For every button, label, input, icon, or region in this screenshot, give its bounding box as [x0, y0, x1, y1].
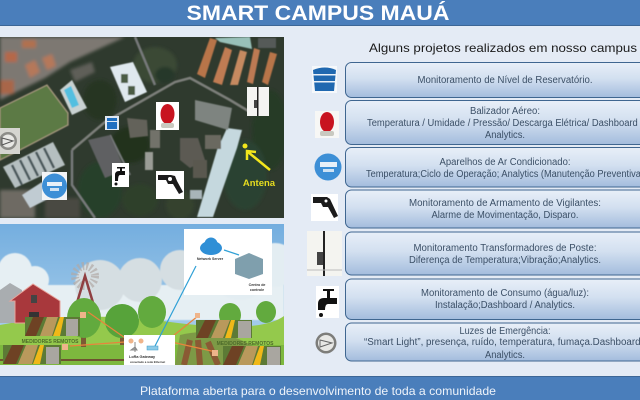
project: reservoir	[312, 62, 640, 98]
wooded patches	[83, 80, 117, 120]
link: gateway to server	[155, 266, 196, 346]
icon: air conditioner on photo	[42, 172, 67, 200]
LoRa gateway box	[124, 335, 175, 365]
card: emergency lights	[346, 323, 640, 361]
residential block	[0, 37, 125, 100]
clouds	[0, 240, 297, 320]
icon: water tank	[312, 66, 337, 93]
grass	[0, 316, 284, 345]
card: consumption: Instalação;Dashboard / Analytics.	[435, 300, 575, 311]
card: air conditioning: Aparelhos de Ar Condicionado:	[440, 157, 570, 168]
card: weapons: Monitoramento de Armamento de Vigilantes:	[409, 198, 601, 209]
football field	[0, 85, 68, 160]
LoRa links	[70, 312, 216, 352]
card: beacon	[346, 100, 640, 144]
icon: air conditioner	[314, 154, 342, 180]
network server box: Network Server	[197, 257, 224, 261]
long white building	[197, 128, 242, 217]
card: consumption: Monitoramento de Consumo (água/luz):	[421, 288, 589, 299]
dark buildings	[127, 118, 148, 138]
label: remote meters left: MEDIDORES REMOTOS	[22, 339, 79, 345]
fence	[0, 359, 125, 361]
label: remote meters right: MEDIDORES REMOTOS	[217, 341, 274, 347]
project: air conditioning	[314, 148, 640, 187]
card: reservoir	[346, 62, 640, 98]
icon: water tank on photo	[105, 116, 119, 130]
antenna label: Antena	[243, 178, 276, 189]
icon: faucet	[316, 286, 339, 318]
card: beacon: Analytics.	[485, 130, 525, 141]
network server box	[184, 229, 272, 295]
card: emergency lights: Analytics.	[485, 350, 525, 361]
card: transformers: Diferença de Temperatura;Vibração;Analytics.	[409, 255, 601, 266]
trees	[67, 296, 276, 347]
footer bar	[0, 376, 640, 400]
footer text: Plataforma aberta para o desenvolvimento de toda a comunidade	[140, 384, 496, 398]
icon: light marker on photo	[156, 102, 179, 130]
title: SMART CAMPUS MAUÁ	[186, 2, 450, 25]
icon: revolver	[311, 194, 338, 221]
card: emergency lights: Luzes de Emergência:	[460, 326, 550, 337]
card: air conditioning	[346, 148, 640, 187]
icon: pole transformer	[307, 231, 342, 276]
project: guards' weapons	[311, 190, 640, 228]
network server box: controle	[250, 288, 264, 292]
card: transformers	[346, 232, 640, 275]
striped hall	[3, 142, 65, 188]
icon: transformer pole on photo	[247, 87, 269, 116]
icon: revolver on photo	[156, 171, 184, 199]
road	[72, 78, 250, 150]
orange roofs	[197, 38, 217, 78]
sensors: remote meters	[3, 317, 281, 365]
card: reservoir: Monitoramento de Nível de Reservatório.	[418, 75, 592, 86]
ploughed field	[175, 332, 253, 365]
white building	[110, 62, 147, 102]
red barn	[10, 284, 60, 323]
icon: beacon	[315, 111, 339, 138]
parking	[195, 100, 232, 130]
LoRa farm illustration	[0, 224, 297, 365]
campus south-west	[0, 190, 35, 218]
icon: emergency light on photo	[0, 128, 20, 154]
aerial campus photo	[0, 37, 288, 219]
project: emergency lights	[316, 323, 640, 361]
icon: emergency light	[316, 332, 336, 354]
antenna pointer	[242, 144, 276, 189]
right heading: Alguns projetos realizados em nosso campus	[369, 41, 637, 55]
card: consumption	[346, 279, 640, 320]
card: weapons: Alarme de Movimentação, Disparo.	[432, 210, 578, 221]
card: weapons	[346, 190, 640, 228]
pool	[60, 80, 87, 115]
project: consumption	[316, 279, 640, 320]
card: beacon: Balizador Aéreo:	[470, 106, 540, 117]
icon: faucet on photo	[112, 163, 129, 187]
project: aerial beacon	[315, 100, 640, 144]
header bar	[0, 0, 640, 26]
card: transformers: Monitoramento Transformadores de Poste:	[414, 243, 596, 254]
LoRa gateway box: LoRa Gateway	[129, 355, 156, 359]
project: pole transformers	[307, 231, 640, 276]
windmill	[73, 266, 97, 316]
silo	[0, 283, 22, 323]
network server box: Centro de	[249, 283, 265, 287]
LoRa gateway box: conectado a rede Ethernet	[130, 360, 165, 364]
